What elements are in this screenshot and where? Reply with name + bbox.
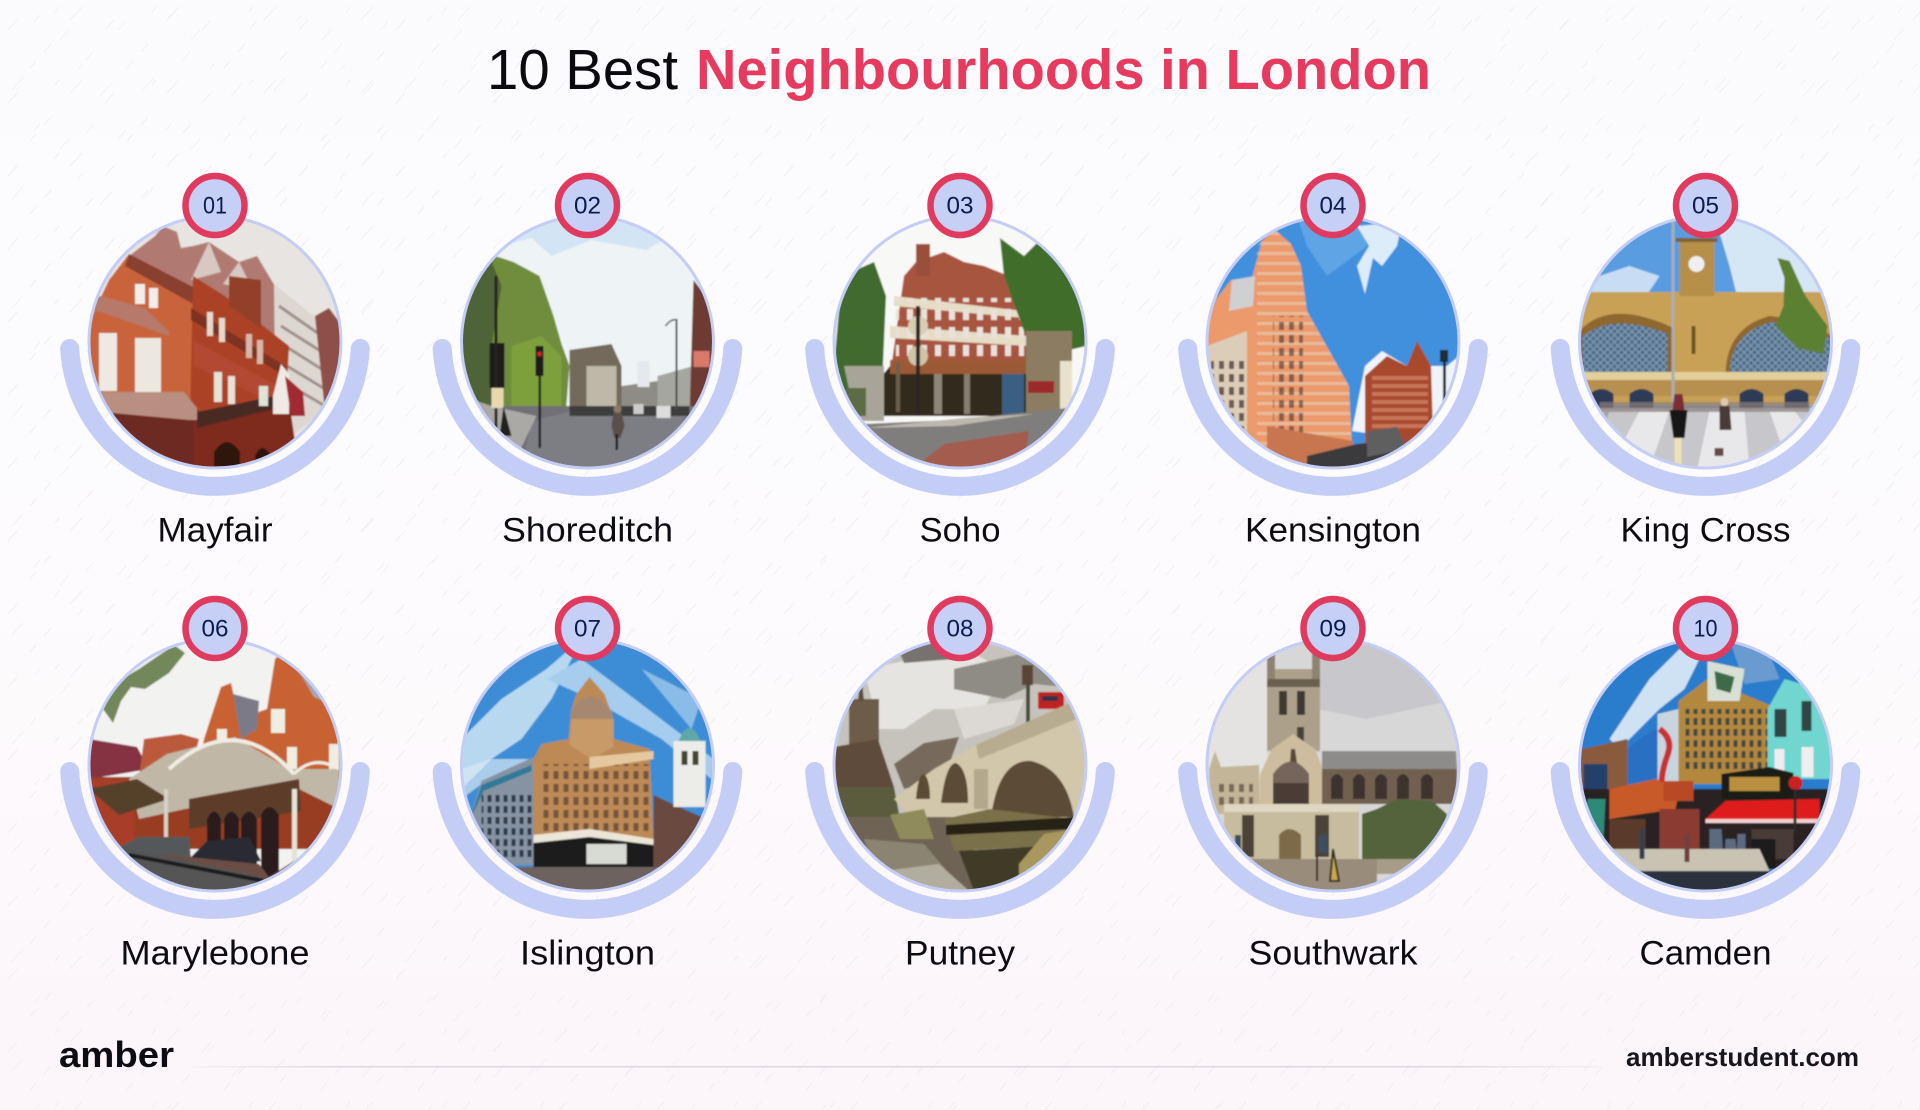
label: Southwark: Southwark [1248,934,1419,972]
label: Shoreditch: Shoreditch [502,512,673,550]
badge 05 [1676,176,1735,235]
label: Putney: Putney [905,934,1015,972]
photo: Camden [1580,639,1832,891]
badge 04: 04 [1320,192,1346,219]
photo: Mayfair [89,216,341,472]
panel: 02 Shoreditch [442,176,733,550]
panel: 06 Marylebone [70,599,360,972]
label: Camden: Camden [1640,934,1772,972]
badge 09: 09 [1320,615,1346,642]
label: Marylebone: Marylebone [120,934,309,972]
badge 02: 02 [574,192,601,219]
badge 09 [1304,599,1362,658]
website: amberstudent.com: amberstudent.com [1626,1042,1859,1072]
badge 03: 03 [946,192,974,219]
photo: Southwark [1207,639,1459,891]
label: Soho: Soho [920,512,1000,550]
panel: 10 Camden [1560,599,1851,972]
photo: Marylebone [89,639,341,891]
photo: Shoreditch [462,216,714,468]
photo: Kensington [1207,216,1459,468]
badge 04 [1304,176,1362,235]
label: Islington: Islington [520,934,655,972]
label: Kensington: Kensington [1245,512,1421,550]
panel: 05 King Cross [1560,176,1851,550]
panel: 09 Southwark [1188,599,1478,972]
badge 10 [1676,599,1735,658]
badge 06: 06 [202,615,228,642]
title: Neighbourhoods in London [696,38,1431,102]
panel: 03 Soho [815,176,1105,550]
label: Mayfair: Mayfair [158,512,272,550]
badge 01: 01 [203,192,227,219]
photo: Putney [834,639,1086,891]
photo: Soho [834,216,1086,468]
badge 08 [930,599,990,658]
panel: 08 Putney [815,599,1105,972]
badge 05: 05 [1692,192,1719,219]
title: 10 Best [487,38,678,102]
logo: amber: amber [59,1034,174,1075]
badge 10: 10 [1694,615,1718,642]
photo: King Cross [1580,216,1832,468]
badge 08: 08 [946,615,974,642]
badge 01 [186,176,244,235]
badge 03 [930,176,990,235]
badge 02 [558,176,617,235]
panel: 01 Mayfair [70,176,360,550]
badge 07 [558,599,617,658]
badge 07: 07 [574,615,601,642]
badge 06 [186,599,244,658]
label: King Cross: King Cross [1620,512,1790,550]
panel: 07 Islington [442,599,733,972]
panel: 04 Kensington [1188,176,1478,550]
photo: Islington [462,639,714,891]
